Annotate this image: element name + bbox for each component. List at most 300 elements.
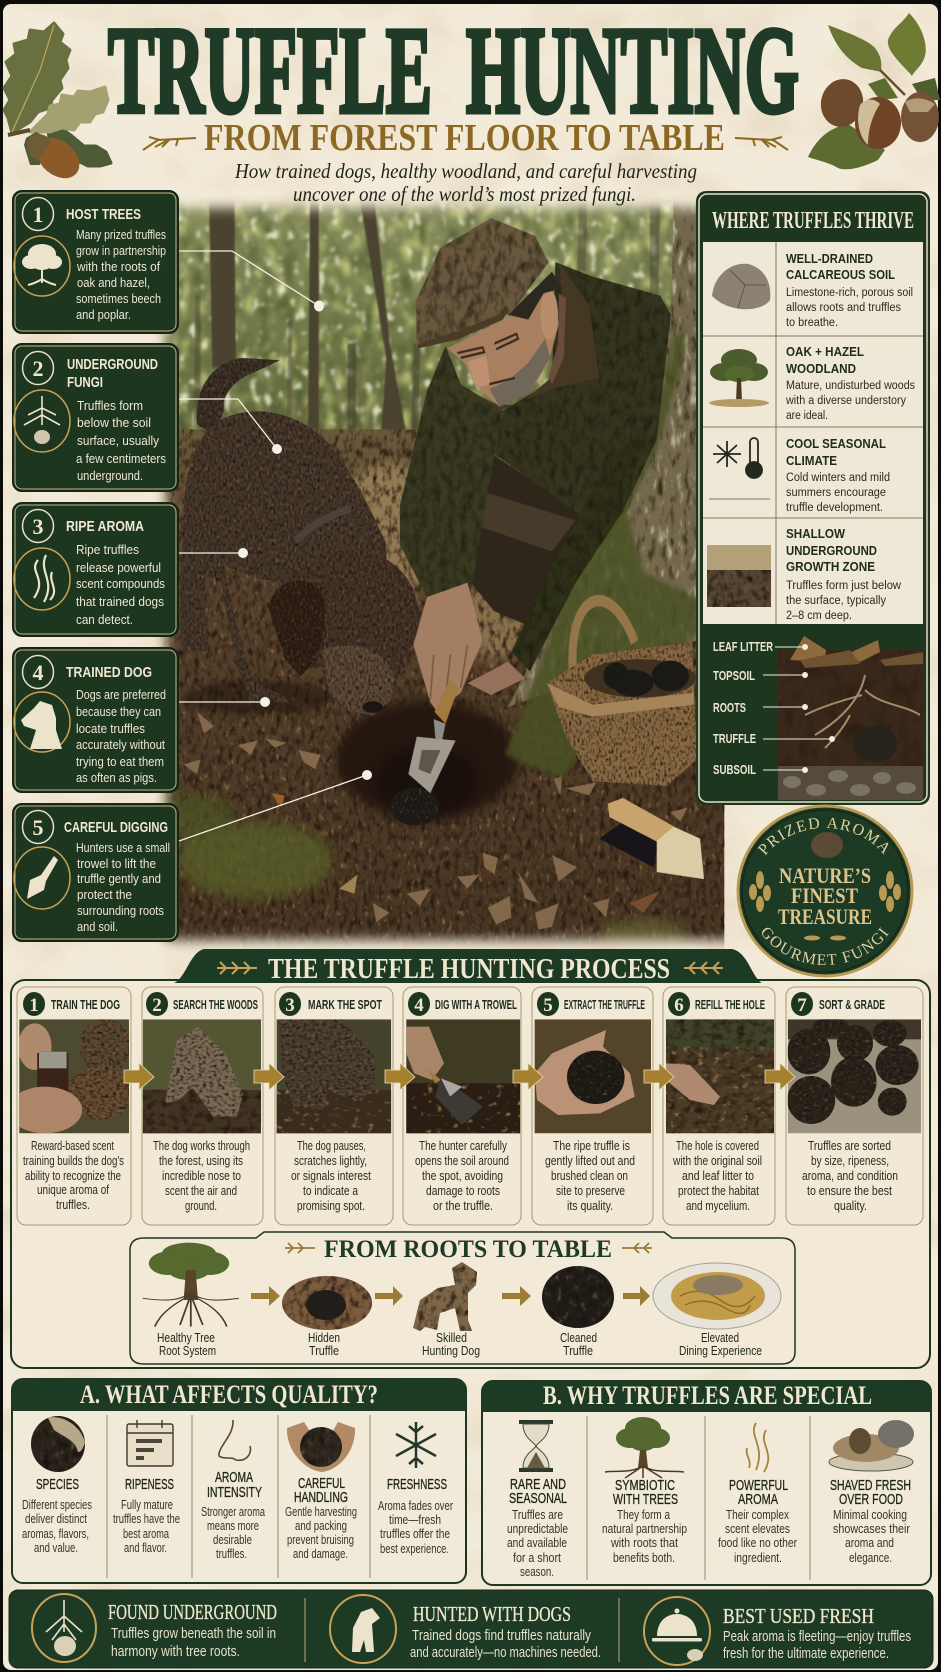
step headings: SORT & GRADE (819, 997, 885, 1012)
column: powerful aroma: Their complex (726, 1507, 789, 1522)
tagline: uncover one of the world’s most prized fungi. (293, 182, 636, 206)
icon: soil cross section (707, 545, 771, 607)
footer band (9, 1590, 933, 1668)
flow labels: Hunting Dog (422, 1343, 480, 1358)
step 2 text: ground. (185, 1198, 217, 1213)
number badge (22, 810, 54, 844)
body text: sometimes beech (76, 291, 161, 306)
column: ripeness (113, 1476, 180, 1555)
column: powerful aroma: food like no other (718, 1535, 798, 1550)
body text: as often as pigs. (76, 770, 157, 785)
heading: UNDERGROUND (67, 356, 158, 373)
step 5 text: gently lifted out and (545, 1153, 635, 1168)
collar (456, 262, 599, 410)
badge text (778, 863, 872, 929)
flow labels: Truffle (309, 1343, 339, 1358)
column: symbiotic with trees: benefits both. (613, 1550, 675, 1565)
body text (76, 687, 166, 785)
step 4 text: The hunter carefully (419, 1138, 507, 1153)
column: rare and seasonal: and available (507, 1535, 567, 1550)
body text: grow in partnership (76, 243, 166, 258)
badge text: NATURE’S (779, 863, 871, 888)
row: cool seasonal climate (786, 436, 890, 514)
heading: FUNGI (67, 374, 103, 391)
icon: sprigs (285, 1243, 652, 1253)
flow labels: Dining Experience (679, 1343, 762, 1358)
soil layer labels (713, 640, 773, 777)
column: powerful aroma: scent elevates (725, 1521, 790, 1536)
column: aroma intensity: means more (207, 1518, 259, 1533)
step 6 text: The hole is covered (676, 1138, 759, 1153)
step 4 text: or the truffle. (433, 1198, 493, 1213)
row: shallow growth zone: GROWTH ZONE (786, 559, 875, 574)
step 5 text: The ripe truffle is (553, 1138, 630, 1153)
step badges: 1 (29, 995, 39, 1016)
step 7 text: Truffles are sorted (808, 1138, 891, 1153)
flow labels: Skilled (436, 1330, 467, 1345)
body text (76, 398, 166, 483)
row: shallow growth zone: 2–8 cm deep. (786, 610, 852, 622)
column: shaved fresh over food: showcases their (833, 1521, 911, 1536)
tagline: How trained dogs, healthy woodland, and careful harvesting (234, 159, 697, 183)
moss on trunk (505, 329, 700, 779)
soil layer labels: LEAF LITTER (713, 640, 773, 654)
step 1 text: unique aroma of (37, 1182, 109, 1197)
icon: roots and truffle (14, 390, 70, 452)
step 1 text: Reward-based scent (31, 1138, 114, 1153)
step 3 text: promising spot. (297, 1198, 365, 1213)
icon: trowel (14, 847, 70, 909)
footer item: hunted with dogs: Trained dogs find truffles naturally (412, 1627, 591, 1644)
step headings: MARK THE SPOT (308, 997, 382, 1012)
seal badge: GOURMET FUNGI (762, 927, 889, 965)
number badge: 2 (32, 356, 44, 381)
row: well-drained soil (786, 251, 913, 329)
column: shaved fresh over food: Minimal cooking (833, 1507, 907, 1522)
step 1 text: training builds the dog's (23, 1153, 124, 1168)
torso (494, 262, 671, 516)
heading: CAREFUL DIGGING (64, 819, 168, 836)
step headings: REFILL THE HOLE (695, 997, 765, 1012)
step headings: SEARCH THE WOODS (173, 997, 258, 1012)
row: oak and hazel woodland (785, 344, 915, 422)
body text (76, 840, 170, 934)
title: TRUFFLE (108, 2, 432, 139)
row: well-drained soil: allows roots and truffles (786, 302, 901, 314)
row: oak and hazel woodland: WOODLAND (786, 361, 856, 376)
icon: serving cloche (644, 1597, 710, 1665)
step 2 text: the forest, using its (159, 1153, 243, 1168)
number badge: 3 (32, 514, 44, 539)
step 2 text: The dog works through (153, 1138, 250, 1153)
number badge (22, 510, 54, 542)
basket (547, 601, 697, 786)
body text: release powerful (76, 560, 161, 575)
body text: Many prized truffles (76, 227, 166, 242)
column: powerful aroma: ingredient. (734, 1550, 782, 1565)
step 3 text: scratches lightly, (294, 1153, 367, 1168)
column: symbiotic with trees: SYMBIOTIC (615, 1477, 675, 1494)
body text: Dogs are preferred (76, 687, 166, 702)
step 7 text (802, 1138, 898, 1213)
number badge: 4 (32, 660, 44, 685)
body text (76, 542, 165, 627)
soil layer leader lines (763, 644, 834, 772)
row: well-drained soil: CALCAREOUS SOIL (786, 267, 895, 282)
icon: scent (14, 548, 70, 610)
seal badge: PRIZED AROMA (758, 818, 888, 856)
column: ripeness: truffles have the (113, 1511, 180, 1526)
column: powerful aroma: POWERFUL (729, 1477, 788, 1494)
column: species: and value. (34, 1540, 78, 1555)
column: ripeness: best aroma (123, 1526, 170, 1541)
step headings (51, 997, 885, 1012)
step badges: 3 (285, 995, 295, 1016)
column: rare and seasonal: RARE AND (510, 1476, 566, 1493)
body text: Hunters use a small (76, 840, 170, 855)
step 3 text: The dog pauses, (297, 1138, 366, 1153)
flow labels: Hidden (308, 1330, 340, 1345)
column: aroma intensity: AROMA (215, 1469, 253, 1486)
column: aroma intensity: truffles. (216, 1546, 247, 1561)
body text: surface, usually (77, 433, 159, 448)
icon: hidden truffle (282, 1276, 372, 1330)
number badge: 1 (32, 202, 44, 227)
column: rare and seasonal: Truffles are (512, 1507, 563, 1522)
step 6 text: and mycelium. (686, 1198, 750, 1213)
tree trunk (508, 202, 696, 707)
footer item: best used fresh (723, 1604, 911, 1662)
row: oak and hazel woodland: OAK + HAZEL (786, 344, 864, 359)
column: shaved fresh over food (830, 1477, 911, 1565)
column: aroma intensity: INTENSITY (207, 1484, 262, 1501)
body text: locate truffles (76, 721, 145, 736)
badge text: TREASURE (778, 904, 872, 929)
step 3 text: or signals interest (291, 1168, 371, 1183)
leaves on ground (184, 712, 687, 929)
icon: aroma steam (747, 1423, 768, 1472)
step badges (23, 992, 813, 1016)
icon: snowflake and thermometer (709, 438, 770, 499)
icon: truffle pasta plate (653, 1263, 781, 1329)
body text: Ripe truffles (76, 542, 139, 557)
column: shaved fresh over food: elegance. (849, 1550, 892, 1565)
sleeve left (400, 346, 503, 597)
icon: hands with truffle (287, 1422, 355, 1472)
icon: shaved truffle plate (829, 1420, 914, 1471)
column: powerful aroma: AROMA (738, 1491, 778, 1508)
process photos (8, 1017, 921, 1133)
row: shallow growth zone: UNDERGROUND (786, 543, 877, 558)
icon: hunting dog (413, 1262, 477, 1331)
flow labels: Elevated (701, 1330, 739, 1345)
column: careful handling: HANDLING (294, 1489, 348, 1506)
panel B: why truffles are special (482, 1381, 931, 1585)
body text: surrounding roots (77, 903, 164, 918)
body text: a few centimeters (76, 451, 166, 466)
heading: TRAINED DOG (66, 664, 152, 681)
icon: cut truffle (31, 1416, 85, 1472)
icon: sprigs (217, 962, 723, 974)
moss patches (177, 822, 332, 898)
column: freshness: best experience. (380, 1541, 449, 1556)
sleeve right (511, 510, 623, 672)
hunter (400, 218, 671, 671)
icon: calendar (127, 1420, 173, 1466)
flow labels: Truffle (563, 1343, 593, 1358)
step 6 text: and leaf litter to (682, 1168, 754, 1183)
column: species: deliver distinct (25, 1511, 87, 1526)
row: shallow growth zone: SHALLOW (786, 526, 846, 541)
step 6 text: with the original soil (672, 1153, 762, 1168)
ear (268, 581, 325, 676)
column: aroma intensity: Stronger aroma (201, 1504, 266, 1519)
forest trunks (193, 200, 660, 430)
column: freshness (378, 1476, 453, 1556)
icon: hourglass (519, 1420, 553, 1472)
step badges: 6 (674, 995, 684, 1016)
footer item: hunted with dogs: HUNTED WITH DOGS (413, 1602, 571, 1626)
soil diagram (778, 636, 923, 800)
row: shallow growth zone: Truffles form just below (786, 580, 902, 592)
column: ripeness: RIPENESS (125, 1476, 174, 1493)
column: species: aromas, flavors, (22, 1526, 89, 1541)
column: species: Different species (22, 1497, 92, 1512)
column: aroma intensity (201, 1469, 266, 1561)
column: shaved fresh over food: OVER FOOD (839, 1491, 903, 1508)
row: shallow growth zone: the surface, typically (786, 595, 886, 607)
column: symbiotic with trees: natural partnership (602, 1521, 687, 1536)
icon: limestone rock (712, 264, 770, 309)
icon: cleaned truffle (542, 1266, 614, 1328)
column: species: SPECIES (36, 1476, 79, 1493)
subtitle: FROM FOREST FLOOR TO TABLE (204, 117, 725, 159)
step 5 text: its quality. (567, 1198, 613, 1213)
body text: below the soil (77, 415, 151, 430)
heading: FROM ROOTS TO TABLE (324, 1236, 612, 1263)
body (180, 411, 386, 702)
flow labels: Root System (159, 1343, 216, 1358)
body text: protect the (77, 887, 132, 902)
forest floor (143, 430, 724, 956)
flow labels (157, 1330, 762, 1358)
column: symbiotic with trees: with roots that (610, 1535, 678, 1550)
shirt (549, 293, 566, 384)
section frame: process (11, 980, 930, 1368)
shadow beneath dog (184, 680, 332, 715)
row: cool seasonal climate: Cold winters and mild (786, 472, 890, 484)
panel: where truffles thrive (696, 191, 930, 805)
number badge (22, 352, 54, 384)
main photo: truffle hunter and dog in forest (143, 186, 724, 956)
column: careful handling: Gentle harvesting (285, 1504, 357, 1519)
arrows (251, 1286, 650, 1306)
body text: accurately without (76, 737, 165, 752)
column: ripeness: Fully mature (121, 1497, 173, 1512)
step 2 text (153, 1138, 250, 1213)
photo 1: scent training (19, 1019, 129, 1134)
column: symbiotic with trees: They form a (617, 1507, 671, 1522)
callout lines (179, 251, 372, 841)
footer item: found underground: FOUND UNDERGROUND (108, 1600, 277, 1624)
column: freshness: truffles offer the (380, 1526, 450, 1541)
row: cool seasonal climate: truffle development. (786, 502, 883, 514)
banner: the truffle hunting process: THE TRUFFLE HUNTING PROCESS (268, 954, 670, 985)
row: well-drained soil: WELL-DRAINED (786, 251, 873, 266)
tail (197, 358, 280, 434)
step badges: 2 (152, 995, 162, 1016)
column: careful handling: and damage. (293, 1546, 348, 1561)
icon: hunted with dogs (330, 1595, 396, 1663)
soil layer labels: ROOTS (713, 701, 746, 715)
body text: and poplar. (76, 307, 131, 322)
column: symbiotic with trees: WITH TREES (613, 1491, 678, 1508)
body text: trying to eat them (76, 754, 164, 769)
icon: hazel leaves and nuts (808, 13, 940, 169)
heading (67, 356, 158, 391)
photo 4: digging (406, 1019, 520, 1133)
column: careful handling: and packing (295, 1518, 347, 1533)
step 4 text: damage to roots (426, 1183, 500, 1198)
muzzle (322, 645, 395, 716)
footer item: found underground (108, 1600, 277, 1660)
collar (295, 509, 351, 541)
truffle in hole (391, 787, 439, 826)
step headings: DIG WITH A TROWEL (435, 997, 517, 1012)
panel: 5 careful digging (13, 804, 178, 941)
body text: scent compounds (76, 576, 165, 591)
row: shallow growth zone (786, 526, 902, 622)
footer item: hunted with dogs (410, 1602, 601, 1661)
footer item: hunted with dogs: and accurately—no machines needed. (410, 1644, 601, 1661)
face (447, 291, 559, 407)
process cards (17, 987, 923, 1225)
photo 3: marking (277, 1019, 391, 1133)
column: symbiotic with trees (602, 1477, 687, 1565)
icon: nose (219, 1420, 250, 1460)
row: cool seasonal climate: COOL SEASONAL (786, 436, 886, 451)
icon: laurels (749, 871, 901, 940)
column: powerful aroma (718, 1477, 798, 1565)
column: rare and seasonal (507, 1476, 568, 1579)
body text: because they can (76, 704, 161, 719)
row: cool seasonal climate: summers encourage (786, 487, 886, 499)
photo 5: extraction (535, 1019, 651, 1133)
footer item: best used fresh: fresh for the ultimate experience. (723, 1645, 889, 1662)
step 7 text: by size, ripeness, (811, 1153, 889, 1168)
step 1 text: ability to recognize the (25, 1168, 121, 1183)
row: well-drained soil: to breathe. (786, 317, 838, 329)
step 7 text: aroma, and condition (802, 1168, 898, 1183)
row: oak and hazel woodland: are ideal. (786, 410, 828, 422)
soil layer labels: TOPSOIL (713, 669, 755, 683)
process step arrows (124, 1063, 795, 1090)
icon: oak leaves and acorn (4, 23, 111, 186)
step 3 text (291, 1138, 371, 1213)
badge text: FINEST (791, 883, 858, 908)
step headings: TRAIN THE DOG (51, 997, 120, 1012)
column: rare and seasonal: SEASONAL (509, 1490, 567, 1507)
trowel (408, 678, 458, 793)
body text: and soil. (77, 919, 118, 934)
column: careful handling: prevent bruising (287, 1532, 354, 1547)
step 7 text: to ensure the best (807, 1183, 892, 1198)
icon: left sprig (143, 137, 196, 150)
panel: 1 host trees (13, 191, 178, 333)
flow labels: Healthy Tree (157, 1330, 215, 1345)
step 2 text: incredible nose to (162, 1168, 241, 1183)
column: species (22, 1476, 92, 1555)
step badges: 4 (414, 995, 424, 1016)
dug hole (336, 700, 518, 819)
step 1 text (23, 1138, 124, 1212)
step badges: 7 (797, 995, 807, 1016)
heading: HOST TREES (66, 206, 141, 223)
footer item: found underground: Truffles grow beneath the soil in (111, 1625, 276, 1642)
column: rare and seasonal: unpredictable (507, 1521, 568, 1536)
column: rare and seasonal: for a short (513, 1550, 561, 1565)
number badge (22, 656, 54, 688)
hands (413, 583, 525, 712)
icon: healthy tree (143, 1243, 239, 1327)
body text: Truffles form (77, 398, 143, 413)
step 7 text: quality. (834, 1198, 867, 1213)
body text: with the roots of (76, 259, 160, 274)
legs (471, 453, 586, 626)
step 5 text: site to preserve (556, 1183, 625, 1198)
column: shaved fresh over food: aroma and (845, 1535, 894, 1550)
body text: that trained dogs (76, 594, 164, 609)
column: freshness: FRESHNESS (387, 1476, 447, 1493)
step headings: EXTRACT THE TRUFFLE (564, 997, 645, 1012)
icon: found underground (32, 1594, 96, 1662)
footer item: best used fresh: BEST USED FRESH (723, 1604, 874, 1628)
icon: truffle (811, 832, 843, 858)
column: careful handling: CAREFUL (298, 1475, 345, 1492)
photo 6: refilling (666, 1019, 774, 1133)
tagline (234, 159, 697, 206)
icon: dog head (14, 692, 70, 752)
footer item: found underground: harmony with tree roots. (111, 1643, 240, 1660)
heading: RIPE AROMA (66, 518, 144, 535)
step 4 text: opens the soil around (415, 1153, 509, 1168)
photo 7: sorted truffles (787, 1017, 921, 1133)
column: careful handling (285, 1475, 357, 1561)
row: cool seasonal climate: CLIMATE (786, 453, 837, 468)
seal badge (736, 804, 914, 978)
column: freshness: time—fresh (389, 1512, 441, 1527)
column: aroma intensity: desirable (213, 1532, 252, 1547)
body text: can detect. (76, 612, 133, 627)
flow labels: Cleaned (560, 1330, 597, 1345)
step 5 text: brushed clean on (551, 1168, 628, 1183)
cap (416, 218, 549, 346)
column: rare and seasonal: season. (520, 1564, 554, 1579)
body text: oak and hazel, (77, 275, 150, 290)
row: oak and hazel woodland: Mature, undisturbed woods (786, 380, 915, 392)
step 4 text (415, 1138, 509, 1213)
column: freshness: Aroma fades over (378, 1498, 453, 1513)
body text: trowel to lift the (77, 856, 156, 871)
number badge (22, 198, 54, 230)
body text: underground. (77, 468, 143, 483)
brush (599, 798, 704, 879)
panel: from roots to table (130, 1232, 795, 1364)
icon: snowflake (396, 1422, 436, 1468)
soil layer labels: SUBSOIL (713, 763, 756, 777)
panel A: what affects quality (12, 1379, 466, 1583)
column: ripeness: and flavor. (124, 1540, 167, 1555)
